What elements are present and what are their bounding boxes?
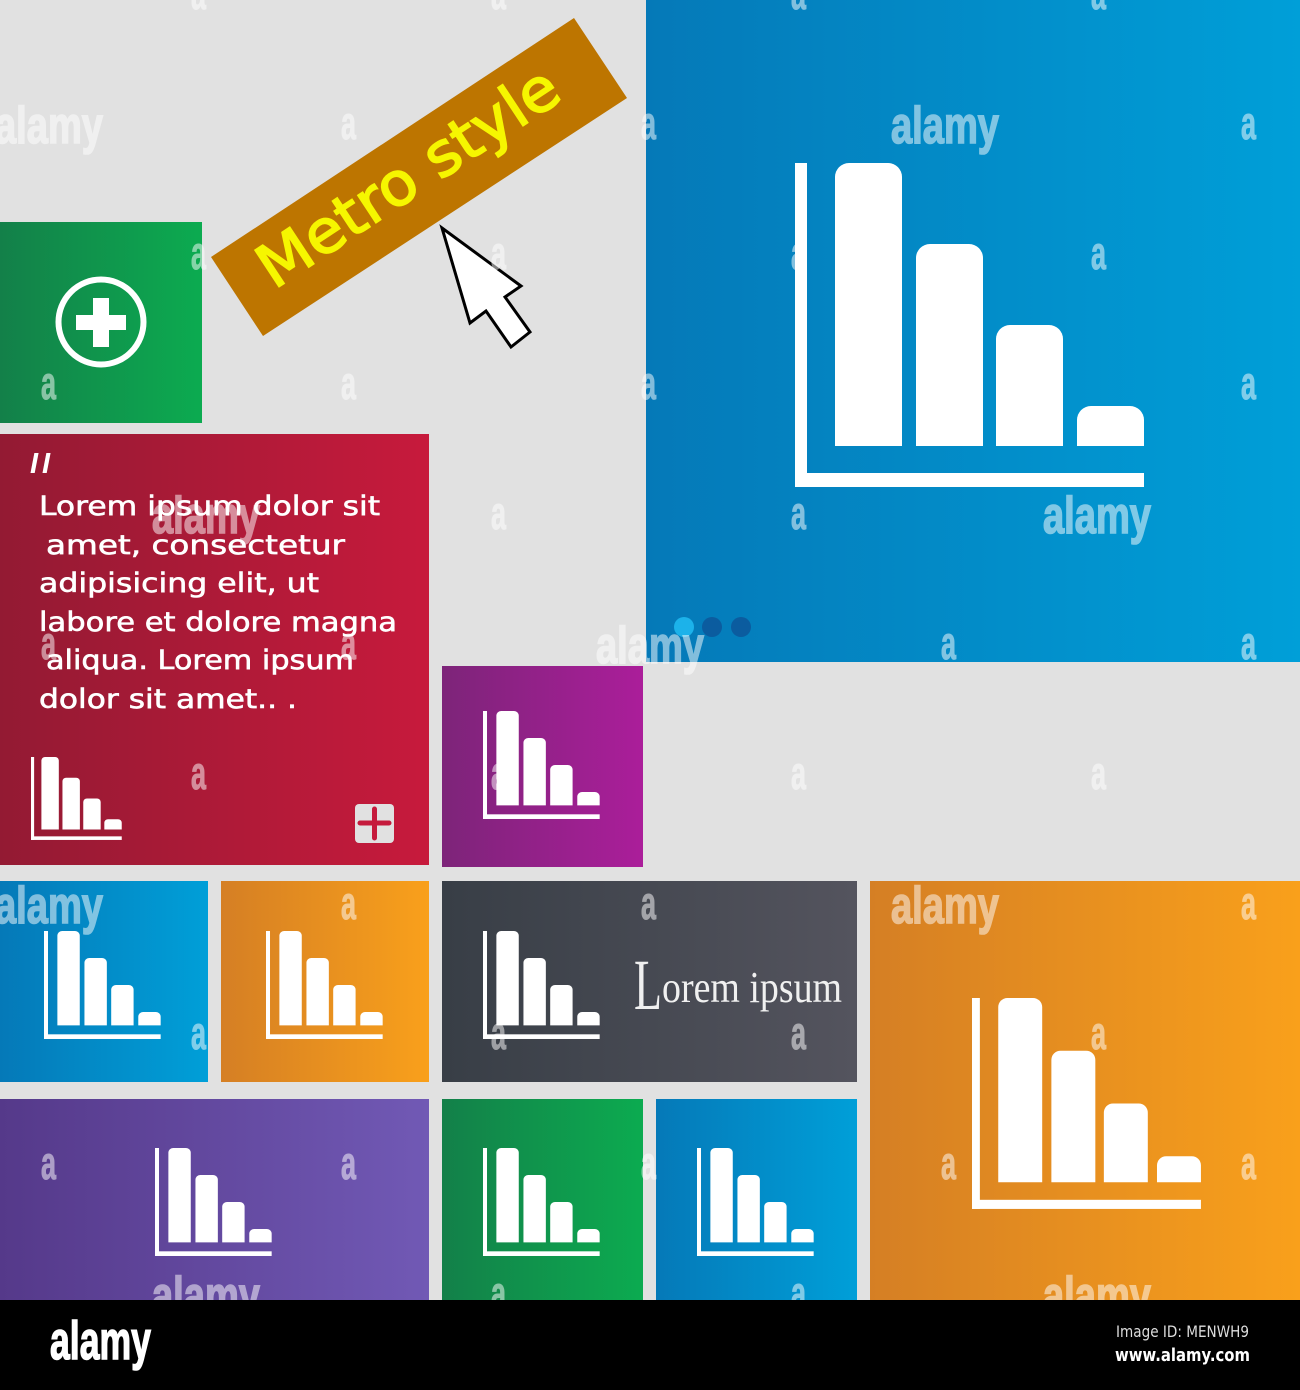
watermarks: a: [491, 747, 506, 799]
icon: large descending bar chart: [795, 163, 1144, 487]
watermarks: a: [1091, 1007, 1106, 1059]
watermarks: alamy: [891, 877, 999, 935]
text block: lorem ipsum: [39, 491, 397, 715]
icon: large bar chart: [972, 998, 1201, 1209]
icon: bar chart: [483, 711, 600, 819]
icon: bar chart: [697, 1148, 814, 1256]
watermarks: a: [791, 1267, 806, 1319]
panel: orange tile: [221, 881, 429, 1082]
image id: Image ID: MENWH9: [1116, 1322, 1249, 1341]
watermarks: alamy: [152, 1267, 260, 1325]
watermarks: a: [791, 227, 806, 279]
panel: green tile: [442, 1099, 643, 1300]
watermarks: alamy: [1043, 487, 1151, 545]
text block: lorem ipsum: amet, consectetur: [46, 530, 346, 561]
icon: plus in circle: [58, 280, 144, 364]
watermarks: a: [941, 617, 956, 669]
watermarks: a: [791, 487, 806, 539]
footer bar: [0, 1300, 1300, 1390]
watermarks: a: [191, 227, 206, 279]
icon: small bar chart: [31, 757, 122, 840]
watermarks: a: [341, 1137, 356, 1189]
watermarks: a: [641, 357, 656, 409]
watermarks: a: [941, 357, 956, 409]
text block: lorem ipsum: adipisicing elit, ut: [39, 568, 319, 599]
label: Lorem ipsum: L: [634, 945, 662, 1025]
label: Lorem ipsum: [634, 945, 842, 1025]
panel: blue tile bottom: [656, 1099, 857, 1300]
watermarks: a: [641, 877, 656, 929]
panel: violet tile: [0, 1099, 429, 1300]
banner: Metro style: [211, 18, 627, 336]
banner: Metro style: Metro style: [244, 53, 573, 303]
watermarks: a: [1241, 877, 1256, 929]
pagination dots: [674, 617, 751, 637]
watermarks: a: [1091, 227, 1106, 279]
icon: bar chart: [483, 1148, 600, 1256]
watermarks: a: [1241, 617, 1256, 669]
panel: green plus tile: [0, 222, 202, 423]
watermarks: a: [1241, 1137, 1256, 1189]
watermarks: a: [1241, 97, 1256, 149]
text block: lorem ipsum: labore et dolore magna: [39, 607, 397, 638]
label: Lorem ipsum: orem ipsum: [662, 963, 842, 1012]
watermarks: a: [1241, 357, 1256, 409]
icon: mouse cursor arrow: [442, 228, 530, 347]
watermarks: a: [641, 1137, 656, 1189]
watermarks: a: [491, 227, 506, 279]
panel: red text tile: [0, 434, 429, 865]
panel: large orange tile: [870, 881, 1300, 1300]
watermarks: a: [491, 1007, 506, 1059]
watermarks: a: [641, 97, 656, 149]
quote mark: II: [30, 448, 51, 480]
watermarks: a: [341, 877, 356, 929]
watermarks: alamy: [891, 97, 999, 155]
icon: bar chart: [44, 931, 161, 1039]
site url: www.alamy.com: [1115, 1345, 1250, 1366]
watermarks: a: [941, 1137, 956, 1189]
icon: bar chart: [266, 931, 383, 1039]
watermarks: a: [491, 487, 506, 539]
text block: lorem ipsum: dolor sit amet.. .: [39, 684, 297, 715]
watermarks: alamy: [1043, 1267, 1151, 1325]
watermarks: a: [41, 1137, 56, 1189]
watermarks: a: [1091, 747, 1106, 799]
panel: purple tile: [442, 666, 643, 867]
text block: lorem ipsum: aliqua. Lorem ipsum: [46, 645, 354, 676]
watermarks: a: [791, 747, 806, 799]
watermarks: a: [41, 617, 56, 669]
footer logo: alamy: [50, 1311, 151, 1371]
panel: large blue tile: [646, 0, 1300, 662]
panel: dark tile: [442, 881, 857, 1082]
watermarks: a: [341, 97, 356, 149]
icon: plus button: [355, 804, 394, 843]
watermarks: a: [191, 1007, 206, 1059]
icon: bar chart: [483, 931, 600, 1039]
text block: lorem ipsum: Lorem ipsum dolor sit: [39, 491, 380, 522]
watermarks: a: [191, 747, 206, 799]
icon: bar chart: [155, 1148, 272, 1256]
watermarks: a: [41, 357, 56, 409]
watermarks: a: [341, 617, 356, 669]
watermarks: a: [341, 357, 356, 409]
panel: blue tile: [0, 881, 208, 1082]
watermarks: a: [791, 1007, 806, 1059]
watermarks: alamy: [596, 617, 704, 675]
watermarks: a: [491, 1267, 506, 1319]
watermarks: alamy: [152, 487, 260, 545]
